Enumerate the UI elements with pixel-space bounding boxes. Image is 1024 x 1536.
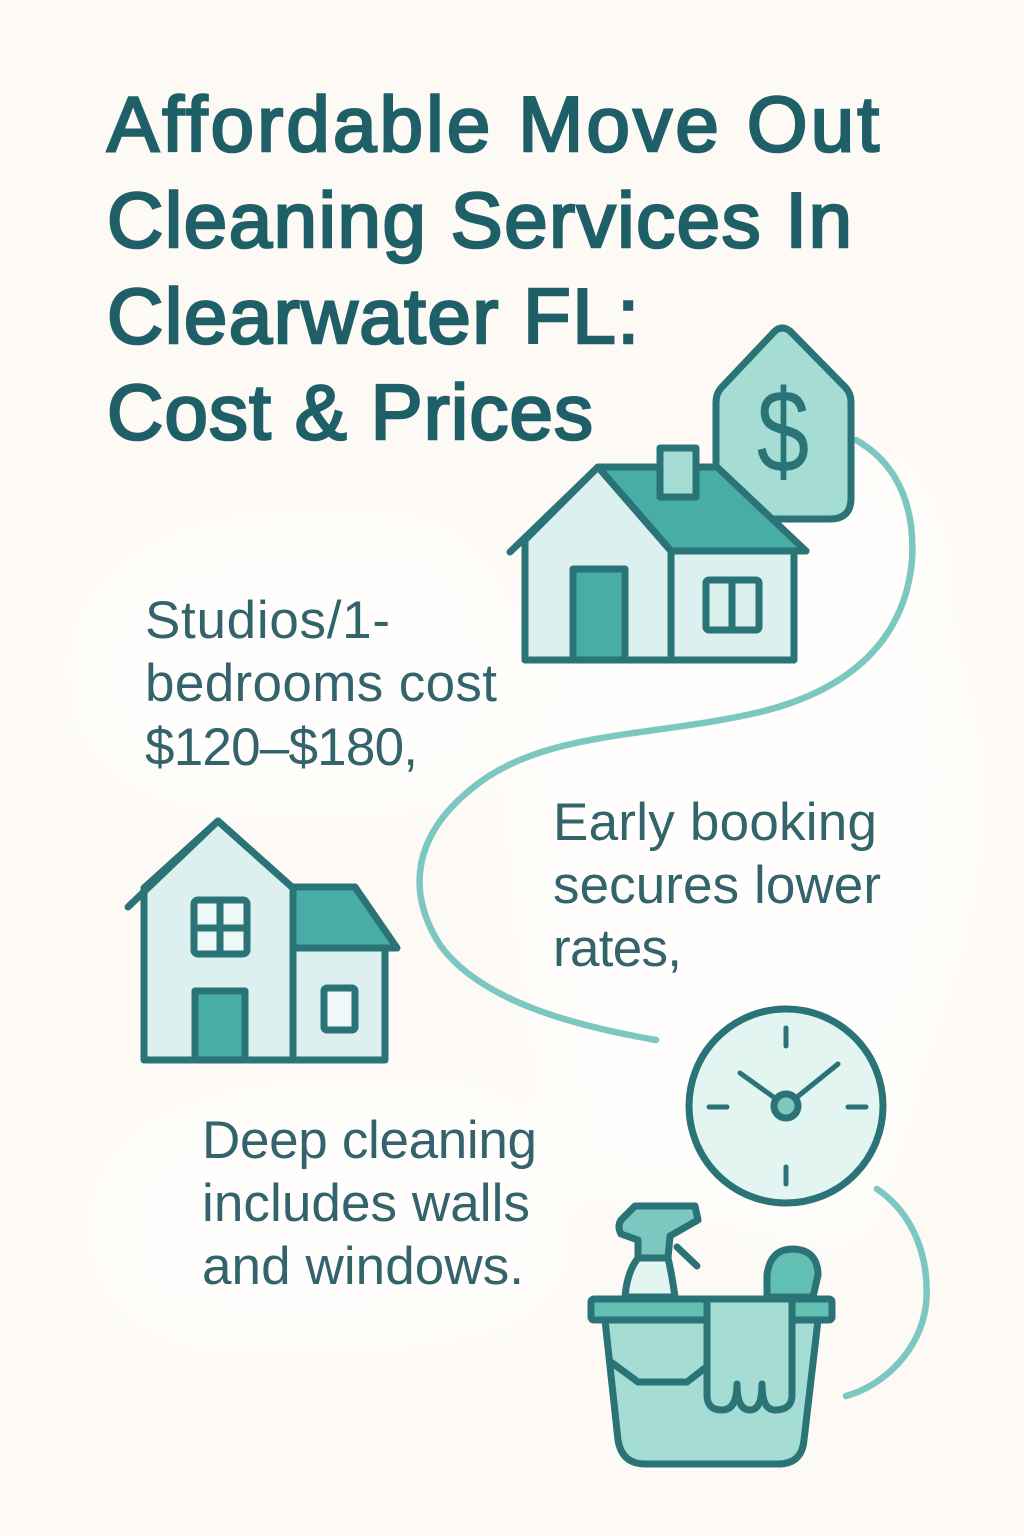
background blobs	[79, 450, 971, 1341]
icon: price tag: $	[757, 365, 809, 497]
text block: early booking: rates,	[553, 919, 682, 978]
icon: cleaning bucket	[591, 1206, 832, 1464]
text block: studios pricing	[145, 591, 497, 777]
title: Cost & Prices	[107, 368, 593, 456]
text block: studios pricing: bedrooms cost	[145, 654, 497, 713]
title	[107, 80, 879, 456]
curved connector line	[420, 440, 912, 1040]
icon: clock	[689, 1009, 883, 1203]
text block: studios pricing: Studios/1-	[145, 591, 390, 650]
text block: deep cleaning: Deep cleaning	[202, 1111, 537, 1170]
text block: deep cleaning: includes walls	[202, 1174, 530, 1233]
text block: early booking: Early booking	[553, 793, 877, 852]
text block: studios pricing: $120–$180,	[145, 718, 418, 777]
text block: deep cleaning: and windows.	[202, 1237, 524, 1296]
text block: deep cleaning	[202, 1111, 537, 1296]
title: Clearwater FL:	[107, 272, 639, 360]
icon: price tag	[716, 328, 851, 519]
icon: house with tag	[510, 448, 806, 660]
title: Cleaning Services In	[107, 176, 852, 264]
lower connector line	[846, 1189, 927, 1396]
text block: early booking	[553, 793, 881, 978]
icon: two-storey house	[128, 821, 397, 1060]
text block: early booking: secures lower	[553, 856, 881, 915]
title: Affordable Move Out	[107, 80, 879, 168]
